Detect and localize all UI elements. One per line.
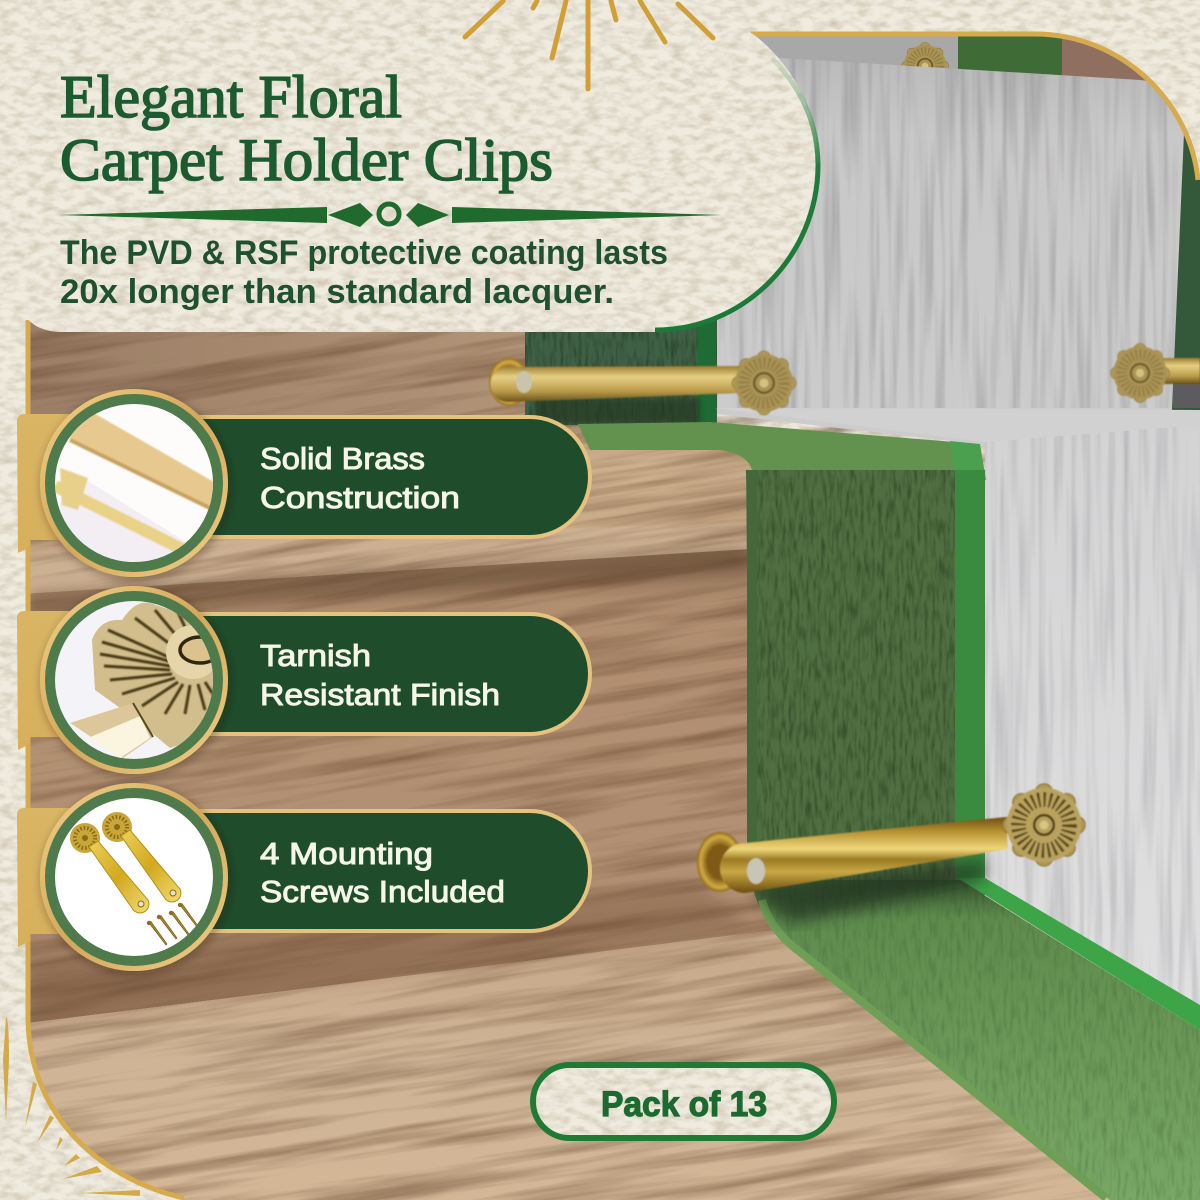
shaded edge of lower green carpet	[747, 470, 757, 870]
feature: tarnish resistant	[17, 586, 590, 774]
wood grain overlay	[20, 320, 1200, 1200]
rod	[490, 366, 740, 402]
feature: solid brass: Construction	[260, 480, 460, 515]
green floor lip	[762, 900, 1106, 1198]
title	[60, 64, 553, 193]
grey patch right	[1173, 384, 1200, 408]
feature: mounting screws	[17, 783, 590, 971]
pill text: Tarnish	[260, 638, 371, 673]
medallion image: rosette macro	[70, 603, 225, 758]
base cup	[697, 832, 743, 892]
rosette	[1003, 784, 1085, 866]
base cup	[489, 358, 529, 406]
header green arc	[655, 58, 818, 330]
tread white carpet	[715, 408, 1194, 410]
feature: mounting screws: Screws Included	[260, 874, 505, 909]
pack of 13 badge	[533, 1065, 834, 1138]
subtitle: The PVD & RSF protective coating lasts	[60, 234, 668, 272]
dark wood band above floor	[28, 880, 750, 1020]
wood: lower riser	[20, 546, 800, 1024]
feature: solid brass	[17, 389, 590, 577]
white carpet: upper riser	[700, 58, 1200, 445]
shadow below lower rod	[752, 860, 985, 925]
rod	[720, 817, 1008, 893]
upper step background	[756, 36, 1146, 81]
medallion image: clips and screws	[70, 812, 198, 945]
medallion image: brass rod macro	[55, 412, 215, 570]
bright green band upper	[698, 320, 716, 425]
right dark green border	[1172, 110, 1200, 410]
badge label: Pack of 13	[601, 1085, 767, 1124]
upper brass clip	[489, 351, 796, 415]
lower riser green carpet	[746, 470, 985, 925]
wood: upper riser	[30, 322, 525, 415]
green floor carpet	[752, 880, 1200, 1200]
green pill	[120, 417, 590, 537]
badge fill	[533, 1065, 834, 1138]
green pill	[120, 811, 590, 931]
subtitle: 20x longer than standard lacquer.	[60, 273, 614, 311]
wood: tread top	[30, 428, 752, 548]
wood: floor tread	[20, 927, 1200, 1200]
badge outline	[533, 1065, 834, 1138]
carpet streaks upper	[700, 58, 1186, 408]
medallion ring	[40, 586, 228, 774]
wood: stair nosing	[30, 522, 747, 594]
green band on tread	[950, 441, 986, 480]
medallion ring	[40, 783, 228, 971]
shadow under upper tread edge	[28, 548, 750, 622]
gold tab	[17, 611, 120, 750]
header panel	[0, 0, 818, 332]
green pill	[120, 614, 590, 734]
title: Carpet Holder Clips	[60, 127, 553, 193]
lower brass clip	[697, 784, 1085, 893]
lower riser white carpet	[980, 425, 1200, 1010]
floor white carpet	[984, 876, 1191, 1024]
feature: tarnish resistant: Resistant Finish	[260, 677, 500, 712]
pill text: Solid Brass	[260, 441, 425, 476]
top gold sun rays	[465, 1, 713, 89]
rosette partly hidden at top step	[901, 42, 949, 68]
bright green floor band	[958, 878, 1200, 1030]
header paper fill	[0, 0, 818, 332]
bottom-left gold sun rays	[3, 1017, 140, 1196]
ornamental divider	[58, 203, 722, 227]
dark green border upper left	[525, 320, 717, 425]
gold tab	[17, 808, 120, 947]
subtitle	[60, 234, 668, 311]
green tread top surface	[578, 422, 985, 470]
lower green band	[955, 470, 985, 880]
pill text: 4 Mounting	[260, 836, 433, 871]
rosette	[732, 351, 796, 415]
title: Elegant Floral	[60, 64, 402, 130]
header green base line	[62, 328, 655, 332]
right brass clip	[1111, 344, 1200, 402]
medallion ring	[40, 389, 228, 577]
shadow below upper rod	[535, 398, 700, 424]
gold tab	[17, 414, 120, 553]
